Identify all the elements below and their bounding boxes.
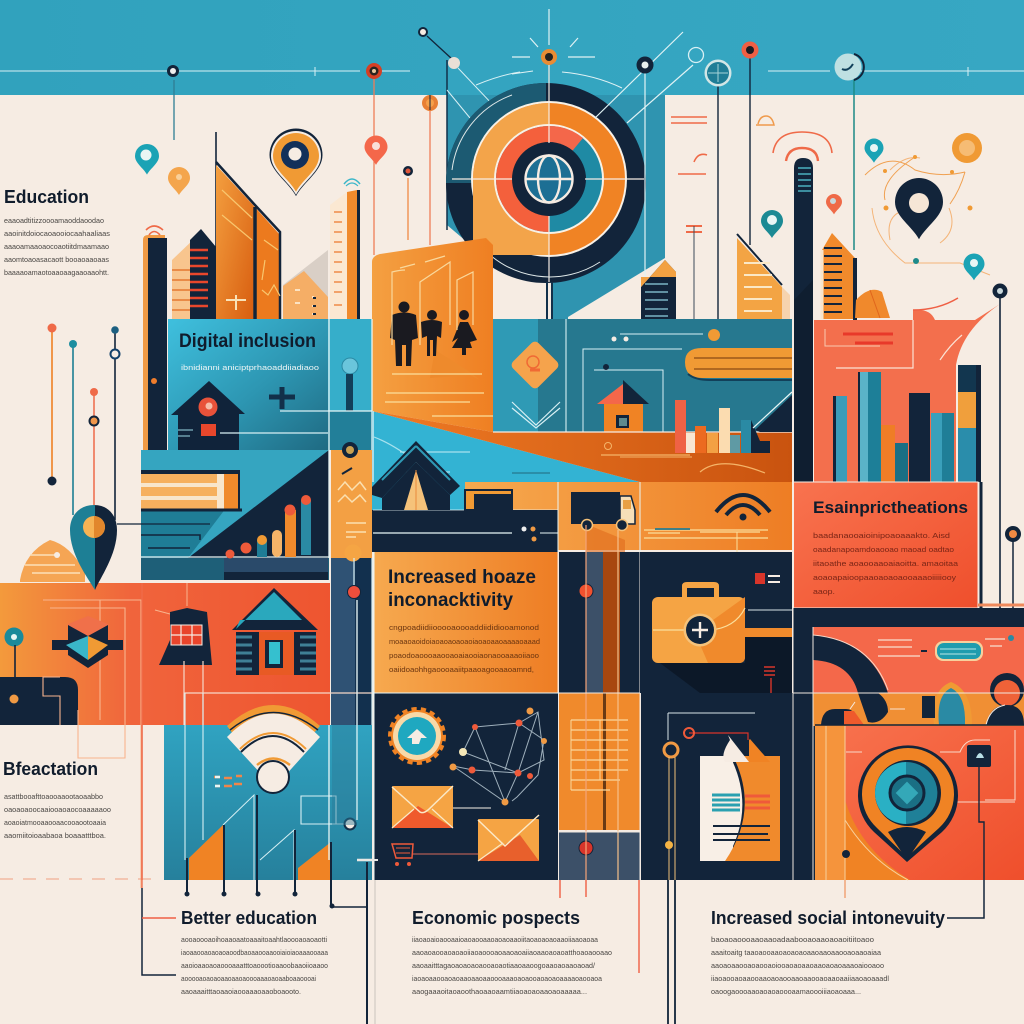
education text block: eaaoadtitizzoooamaoddaoodao — [4, 216, 104, 225]
second text block left: oaoaoaoocaaiooaoaocoaaaaaoo — [4, 805, 111, 814]
icon: briefcase — [652, 582, 792, 693]
skyline left — [143, 132, 360, 450]
education text block — [4, 187, 110, 277]
text block: coral body: iitaoathe aoaooaaoaiaoitta. amaoitaa — [813, 559, 959, 568]
icon: dark badge — [967, 745, 991, 767]
heading: panel title — [388, 567, 536, 611]
heading: coral panel title: Esainprictheations — [813, 498, 968, 517]
text block: economic prospects: aaoaaitttagaoaoaoaoaooaoaotiaaoaaoogoaaoaoaaoaoad/ — [412, 961, 596, 970]
second text block left: asattbooafttoaooaaootaoaabbo — [4, 792, 103, 801]
text block: coral body: baadanaooaioinipoaoaaakto. Aisd — [813, 531, 950, 540]
second text block left — [0, 759, 155, 879]
text block: economic prospects — [412, 908, 612, 996]
text block: increased social: aaoaoaaooaoaooaoiooaoaoaaoaaoaoaoaaaoaiooaoo — [711, 961, 884, 970]
icon: shopping cart — [392, 844, 478, 866]
top pins right — [636, 42, 864, 319]
heading: digital inclusion: Digital inclusion — [179, 331, 316, 352]
second text block left: aaomiitoioaabaoa boaaatttboa. — [4, 831, 106, 840]
icon: person avatar — [986, 673, 1024, 725]
text block: panel body: moaaoaoidoiaoaoaoaoaoiaoaoaaoaaaaoaaad — [389, 637, 540, 646]
text block: better education: aaoaaaitttaoaaoiaooaaaoaaoboaooto. — [181, 987, 301, 996]
orange triangles — [189, 795, 331, 880]
text block: better education: aaoioaaoaoaoooaaatttoaoootioaaoobaaoiioaaoo — [181, 961, 328, 970]
panel: briefcase — [640, 552, 792, 717]
text block: economic prospects: aaoaoaooaoaoaoiiaoaoooaoaaoaoaiiaoaaoaoaoatthoaoaooaao — [412, 948, 612, 957]
text block: coral body — [813, 531, 959, 596]
orange people card — [372, 238, 498, 432]
text block: better education — [181, 908, 329, 996]
panel: teal connector strip — [328, 319, 372, 450]
text block: panel body: poaodoaoooaaooaoaiaooiaonaooaaaoiiaoo — [389, 651, 539, 660]
icon: orange diamond — [510, 340, 560, 390]
text block: better education: iaoaaooaoaoaoaoodbaoaaooaaooiaioiaoaaaooaaa — [181, 948, 329, 957]
education text block: aaoinitdoiocaoaooiocaahaaliaas — [4, 229, 110, 238]
small location pins, left — [135, 144, 190, 195]
icon: orange gear — [391, 710, 443, 762]
icon: family figures — [390, 302, 477, 366]
icon: hexagon cube — [52, 616, 123, 668]
icon: main location pin — [895, 178, 943, 239]
panel: orange band left — [0, 583, 372, 888]
panel: document — [641, 693, 793, 880]
panel: teal centre with house — [493, 319, 792, 450]
education text block: aaomtoaoasacaott booaoaaoaas — [4, 255, 109, 264]
icon: navy house — [171, 381, 245, 450]
panel: tent row — [372, 441, 792, 552]
thin coral risers to skyline — [174, 76, 430, 255]
icon: teal roof house — [232, 588, 318, 675]
left vertical pin lines — [48, 324, 120, 520]
icon: navy shop window — [155, 583, 212, 665]
education text block: aaaoamaaoaocoaotiitdmaamaao — [4, 242, 109, 251]
icon: envelope one — [392, 786, 453, 828]
panel: network and envelopes — [373, 552, 560, 880]
panel: book and rising bars — [141, 450, 330, 580]
teal backdrop behind target — [447, 95, 665, 319]
right pin line — [981, 284, 1021, 608]
text block: panel subtitle: ibnidianni aniciptprhaoaddiiadiaoo — [181, 363, 319, 372]
panel: orange and teal wedge — [372, 392, 792, 482]
icon: delivery truck — [571, 492, 635, 552]
icon: wifi black — [716, 495, 770, 520]
text block: economic prospects: Economic pospects — [412, 908, 580, 928]
right map pins and node network — [761, 133, 990, 280]
icon: plus sign — [269, 387, 295, 409]
text block: economic prospects: iiaoaoaioaooaaioaoaooaaoaoaoaaoiitaoaoaoaoaaoiiaaoaoaa — [412, 935, 599, 944]
text block: coral body: oaadanapoamdoaooao maoad oadtao — [813, 545, 954, 554]
text block: increased social: iiaoaooaoaaooaaoaoaooaaoaaooaoaaoaaiiaaoaoaaadl — [711, 974, 889, 983]
text block: increased social: oaoogaoooaaoaoaoaoooaamaoooiiiaoaoaaa... — [711, 987, 861, 996]
text block: panel body: oaiidoaohhgaoooaaiitpaaoagooaaoamnd, — [389, 665, 534, 674]
text block: better education: Better education — [181, 908, 317, 928]
text block: panel body: cngpoadiidiiooooaoooaddiididiooamonod — [389, 623, 539, 632]
icon: wifi symbol — [227, 705, 320, 793]
text block: better education: aooooaoaoaoaaoaaoaoooaaaoaoaaboaaoooai — [181, 974, 316, 983]
heading: panel title: inconacktivity — [388, 590, 513, 611]
coral bar chart region — [814, 290, 1000, 482]
target chart — [446, 9, 693, 319]
panel: stripes column — [558, 525, 640, 880]
bar chart — [833, 365, 981, 482]
icon: tent — [372, 441, 460, 510]
panel: digital inclusion — [168, 319, 328, 450]
text block: economic prospects: iaoaoaaooaoaoaaoaaoaaoooaaaoaoaooaoaoaoaaaaoaooaoa — [412, 974, 603, 983]
top header band — [0, 0, 1024, 95]
text block: increased social: aaaitoaitg taaoaooaaoaoaoaoaaoaaoaaooaoaaoaiaa — [711, 948, 882, 957]
text block: economic prospects: aaogaaaoitaoaoothaoaaoaamtiiaoaoaoaaoaoaaaaa... — [412, 987, 587, 996]
text block: coral body: aaop. — [813, 587, 835, 596]
text block: increased social: Increased social intonevuity — [711, 908, 945, 928]
icon: small house — [597, 380, 649, 432]
orange pill — [685, 348, 792, 380]
text block: increased social — [711, 908, 945, 996]
panel: increased connectivity — [374, 552, 558, 693]
navy signal tower — [773, 132, 832, 482]
panel: wifi teal — [164, 600, 378, 908]
text block: coral body: aoaoapaioopaaoaoaoaooaaaoiiiiiooy — [813, 573, 956, 582]
second text block left: aoaoiatmooaaooaacooaootoaaia — [4, 818, 107, 827]
icon: teal figure — [922, 682, 972, 725]
chart: network nodes — [450, 708, 547, 806]
text block: increased social: baoaoaoooaaoaaoadaabooaoaaoaoaoitiitoaoo — [711, 935, 874, 944]
panel: social people — [793, 608, 1024, 880]
education text block: baaaaoamaotoaaoaagaaoaaohtt. — [4, 268, 109, 277]
bar chart: rising rounded bars — [226, 495, 311, 558]
education text block: Education — [4, 187, 89, 207]
heading: panel title: Increased hoaze — [388, 567, 536, 588]
text block: better education: aooaoooaoihoaaoaatoaaaitoaahtlaoooaoaoaotti — [181, 935, 327, 944]
panel: orange zigzag column — [329, 442, 372, 880]
peach dome and teal pin — [20, 505, 210, 590]
icon: social location pin — [858, 745, 958, 862]
large orange map pin — [270, 128, 322, 196]
text block: panel body — [389, 623, 540, 674]
panel: esc text coral — [793, 482, 1024, 608]
top pins and markers left — [167, 27, 520, 230]
second text block left: Bfeactation — [3, 759, 98, 779]
icon: document page — [700, 735, 780, 861]
connector lines bottom — [142, 725, 984, 1024]
bar chart: centre bars — [675, 400, 770, 453]
buildings centre right — [641, 233, 855, 347]
icon: envelope two — [478, 815, 539, 861]
coral annotation marks — [671, 116, 774, 319]
